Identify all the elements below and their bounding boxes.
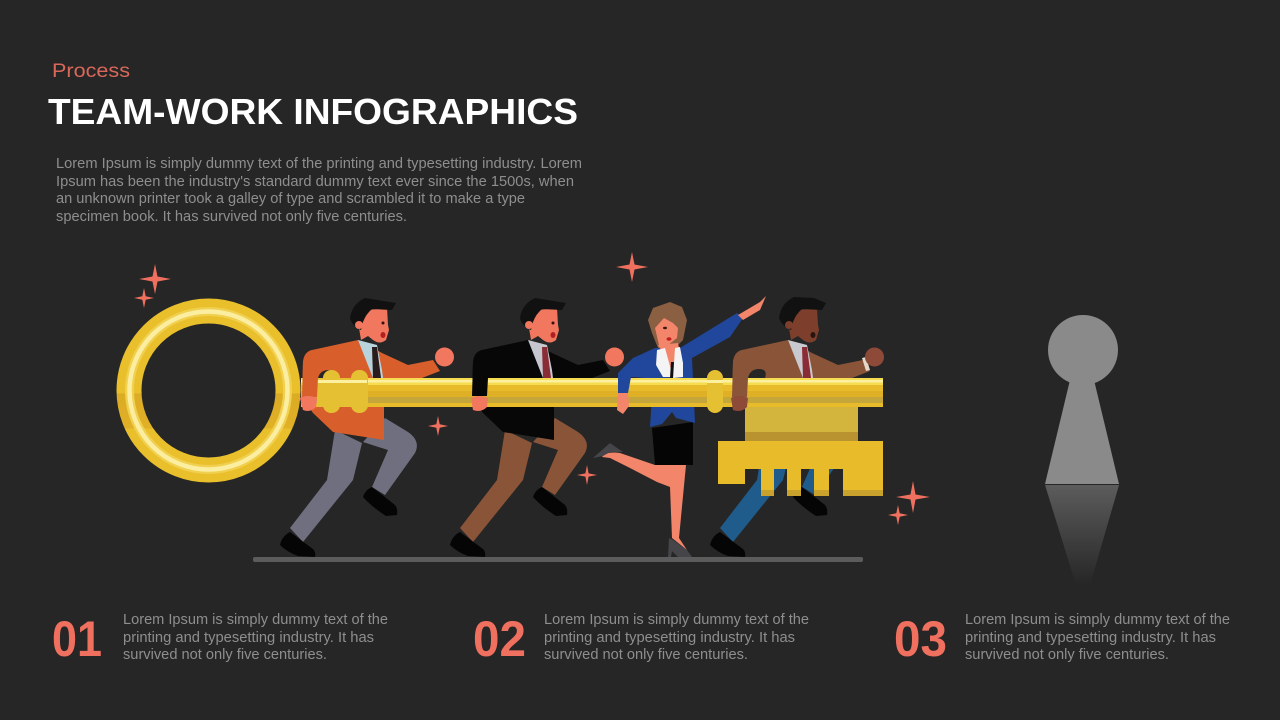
- sparkles: [134, 252, 930, 525]
- key ring: [129, 311, 288, 470]
- step 03: survived not only five centuries.: [965, 647, 1169, 663]
- step 02: survived not only five centuries.: [544, 647, 748, 663]
- step 01: Lorem Ipsum is simply dummy text of the: [123, 612, 388, 628]
- icon: keyhole: [1045, 315, 1119, 585]
- step 01: printing and typesetting industry. It has: [123, 630, 374, 646]
- intro text block: [56, 156, 582, 225]
- step 02: printing and typesetting industry. It has: [544, 630, 795, 646]
- intro text block: an unknown printer took a galley of type and scrambled it to make a type: [56, 191, 525, 207]
- figure: woman body: [593, 296, 766, 557]
- step 01: 01: [52, 611, 102, 667]
- step 03: printing and typesetting industry. It has: [965, 630, 1216, 646]
- golden key: [129, 311, 883, 496]
- ground line: [253, 557, 863, 562]
- step 02: Lorem Ipsum is simply dummy text of the: [544, 612, 809, 628]
- title: TEAM-WORK INFOGRAPHICS: [48, 91, 578, 132]
- intro text block: Lorem Ipsum is simply dummy text of the printing and typesetting industry. Lorem: [56, 156, 582, 172]
- step 03: Lorem Ipsum is simply dummy text of the: [965, 612, 1230, 628]
- figure: man 2 body: [450, 298, 624, 557]
- step 02: [473, 611, 809, 667]
- intro text block: Ipsum has been the industry's standard dummy text ever since the 1500s, when: [56, 174, 574, 190]
- intro text block: specimen book. It has survived not only five centuries.: [56, 209, 407, 225]
- step 03: [894, 611, 1230, 667]
- key bit: [718, 407, 883, 496]
- step 01: [52, 611, 388, 667]
- step 03: 03: [894, 611, 947, 667]
- eyebrow: Process: Process: [52, 60, 130, 82]
- arms and hands gripping the key: [300, 348, 750, 414]
- figure: man 4 body: [710, 297, 884, 557]
- step 01: survived not only five centuries.: [123, 647, 327, 663]
- key shaft: [301, 378, 883, 407]
- step 02: 02: [473, 611, 526, 667]
- key collars: [317, 370, 723, 413]
- figure: man 1 body: [280, 298, 454, 557]
